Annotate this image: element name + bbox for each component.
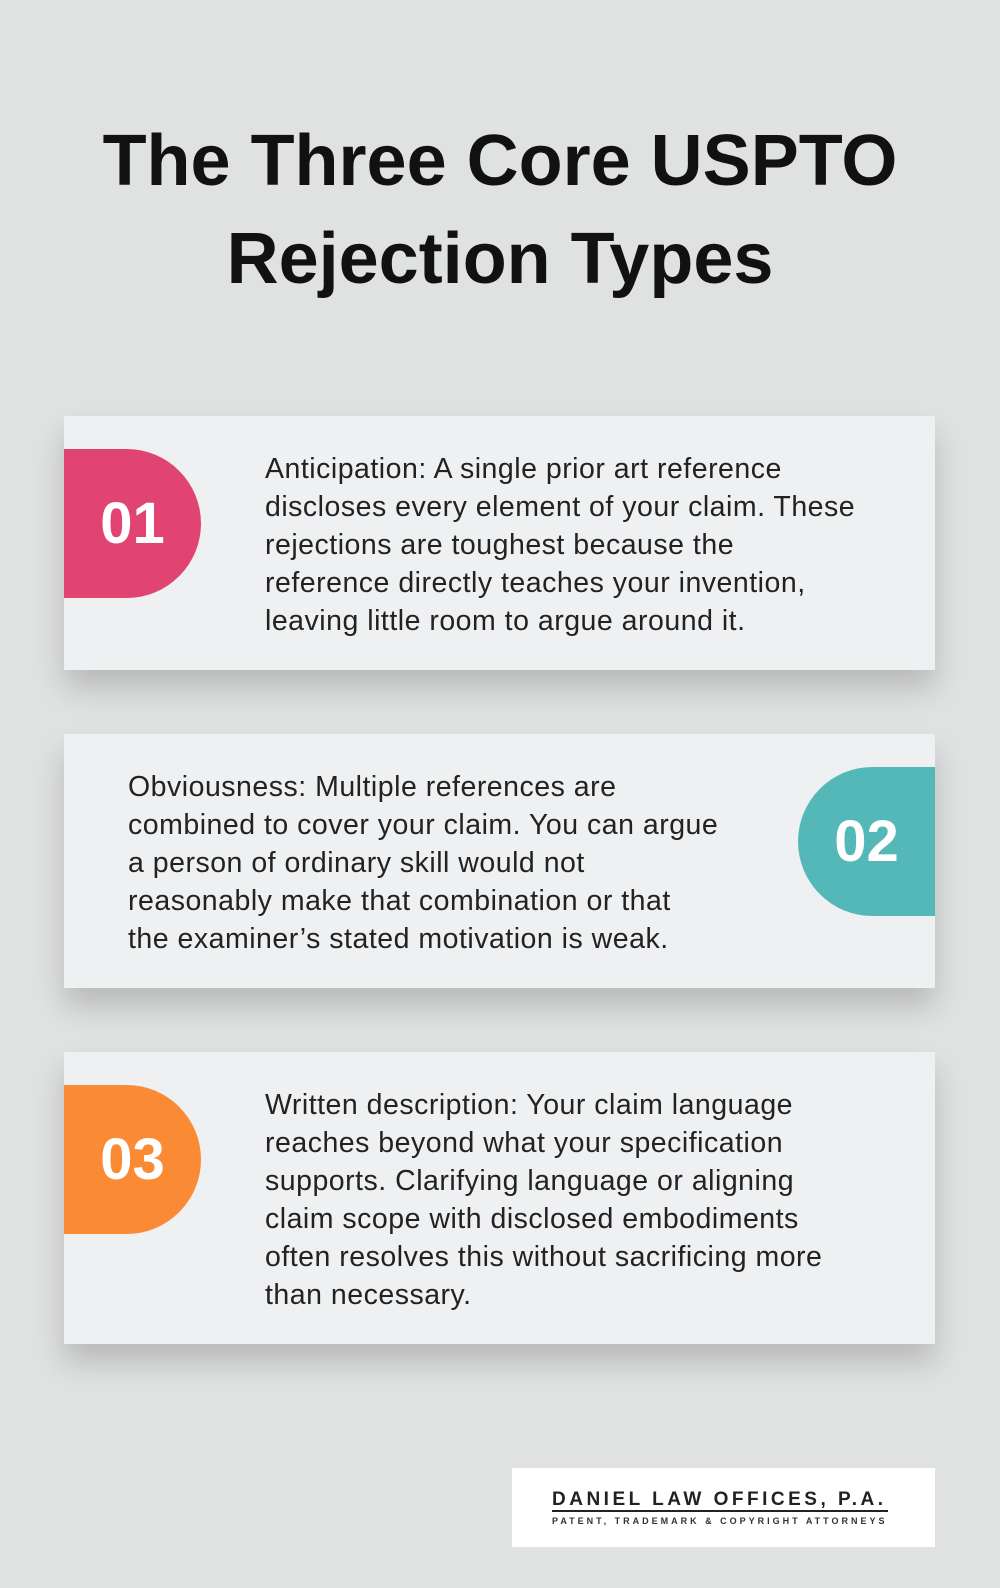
text: written description (265, 1089, 822, 1311)
panel: card 03 (64, 1052, 935, 1344)
text: written description: claim scope with disclosed embodiments (265, 1203, 799, 1235)
text: obviousness: reasonably make that combination or that (128, 885, 671, 917)
text: anticipation: reference directly teaches your invention, (265, 567, 806, 599)
text: obviousness: Obviousness: Multiple references are (128, 771, 616, 803)
text: anticipation: leaving little room to argue around it. (265, 605, 746, 637)
badge 02: 02 (834, 809, 899, 874)
badge 03 (64, 1085, 201, 1234)
title: Rejection Types (227, 219, 773, 299)
text: written description: supports. Clarifying language or aligning (265, 1165, 794, 1197)
text: obviousness: a person of ordinary skill would not (128, 847, 585, 879)
text: written description: than necessary. (265, 1279, 472, 1311)
panel: card 02 (64, 734, 935, 988)
panel: card 01 (64, 416, 935, 670)
text: obviousness: the examiner’s stated motivation is weak. (128, 923, 669, 955)
text: obviousness (128, 771, 718, 955)
text: anticipation (265, 453, 855, 637)
text: anticipation: discloses every element of your claim. These (265, 491, 855, 523)
badge 03: 03 (100, 1127, 165, 1192)
badge 01 (64, 449, 201, 598)
text: written description: often resolves this without sacrificing more (265, 1241, 822, 1273)
text: written description: reaches beyond what your specification (265, 1127, 783, 1159)
title: The Three Core USPTO (103, 121, 897, 201)
text: obviousness: combined to cover your claim. You can argue (128, 809, 718, 841)
text: written description: Written description: Your claim language (265, 1089, 793, 1121)
badge 01: 01 (100, 491, 165, 556)
logo (512, 1468, 935, 1547)
logo: PATENT, TRADEMARK & COPYRIGHT ATTORNEYS (552, 1516, 888, 1526)
text: anticipation: rejections are toughest because the (265, 529, 734, 561)
logo: DANIEL LAW OFFICES, P.A. (552, 1489, 887, 1510)
text: anticipation: Anticipation: A single prior art reference (265, 453, 782, 485)
badge 02 (798, 767, 935, 916)
title (103, 121, 897, 299)
